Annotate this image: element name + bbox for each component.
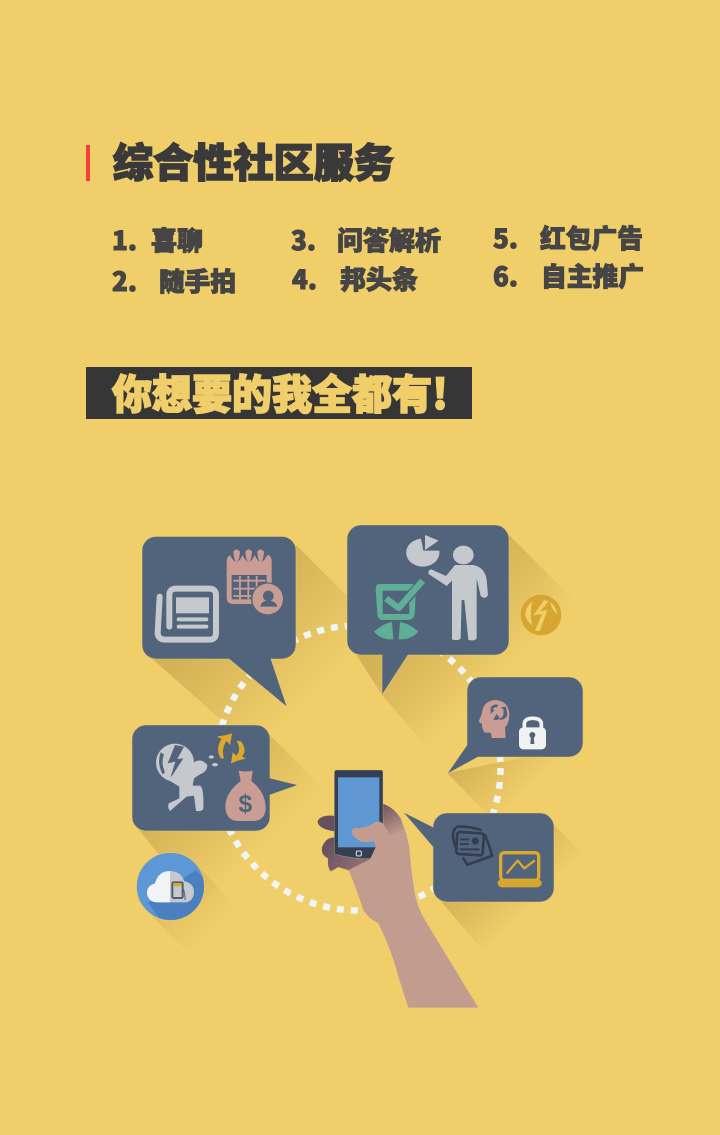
item 1: 1. (112, 221, 137, 258)
item 3 (291, 221, 441, 258)
item 6: 自主推广 (541, 257, 644, 294)
heading text: 综合性社区服务 (113, 131, 394, 189)
item 3: 问答解析 (337, 221, 441, 258)
icon: gold globe (521, 595, 561, 635)
back of fingers (382, 803, 407, 843)
item 5 (493, 219, 643, 256)
icon: documents (453, 827, 492, 865)
hand holding phone (317, 770, 478, 1008)
icon: presenter (428, 546, 488, 640)
bubble shape (347, 525, 509, 695)
dotted ring (216, 626, 500, 910)
icon: gold recycle arrows (217, 733, 246, 763)
item 5: 5. (493, 219, 518, 256)
bubble shape (132, 725, 298, 831)
forearm and thumb (349, 822, 478, 1008)
icon: money bag: $ (238, 791, 252, 818)
item 1: 喜聊 (151, 221, 203, 258)
bubble shape (447, 677, 583, 774)
item 4: 邦头条 (340, 260, 418, 297)
bubble shape (142, 536, 296, 707)
item 6 (493, 257, 644, 294)
banner background (86, 367, 472, 419)
heading: community services (86, 131, 394, 189)
icon: padlock (519, 718, 546, 749)
icon: green monitor with check (374, 581, 423, 639)
icon: calendar with user (227, 547, 284, 616)
icon: newspaper (158, 589, 216, 640)
item 5: 红包广告 (540, 219, 643, 256)
phone (334, 770, 383, 859)
icon: figure carrying globe (156, 744, 218, 811)
item 2 (112, 262, 236, 299)
item 3: 3. (291, 221, 316, 258)
icon: pie chart (406, 535, 439, 567)
item 4: 4. (292, 260, 317, 297)
bubble shape (403, 812, 554, 902)
icon: laptop with chart (498, 853, 542, 887)
device on cloud (172, 882, 185, 900)
speech bubble: presenter and approval (347, 525, 509, 695)
speech bubble: atlas and money (132, 725, 298, 831)
cloud right half (170, 871, 194, 902)
banner text: 你想要的我全都有! (112, 361, 448, 421)
fingers behind the phone (317, 815, 377, 873)
item 2: 随手拍 (159, 262, 236, 299)
icon: cloud in blue circle (136, 852, 204, 920)
item 4 (292, 260, 418, 297)
speech bubble: mind and lock (447, 677, 583, 774)
cloud left half (147, 871, 170, 902)
item 2: 2. (112, 262, 137, 299)
feature list (112, 219, 644, 299)
speech bubble: documents and laptop (403, 812, 554, 902)
red accent bar (86, 145, 90, 181)
banner: everything you want (86, 361, 472, 421)
speech bubble: news and calendar (142, 536, 296, 707)
long shadows (136, 535, 640, 990)
item 1 (112, 221, 203, 258)
icon: head with arrows (479, 700, 509, 738)
item 6: 6. (493, 257, 518, 294)
